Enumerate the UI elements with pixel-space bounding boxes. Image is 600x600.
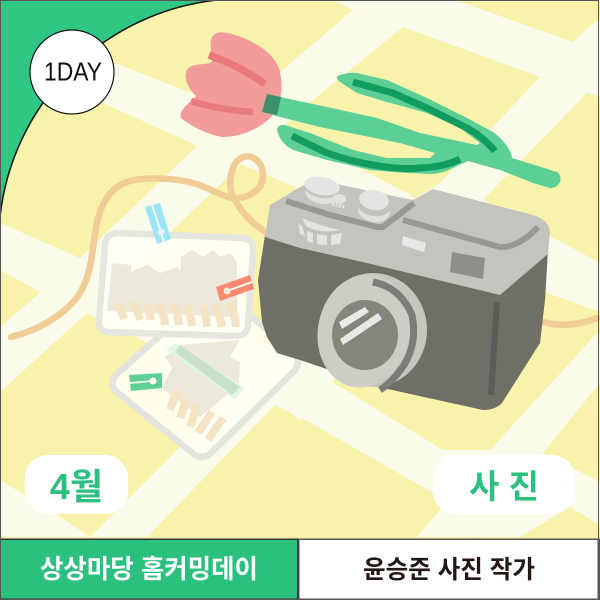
grip strip xyxy=(491,302,497,395)
bottom bar: event name: 상상마당 홈커밍데이 xyxy=(40,554,258,584)
clip: red xyxy=(216,275,254,301)
photo: upper print xyxy=(99,203,254,336)
dials xyxy=(303,174,393,225)
camera top plate xyxy=(265,180,550,295)
badge: 1DAY xyxy=(30,30,114,114)
stem and leaves xyxy=(262,73,561,188)
pill: category: 사 진 xyxy=(469,468,539,505)
clip: blue xyxy=(145,203,171,244)
string xyxy=(11,156,597,337)
bottom bar: event name xyxy=(0,538,299,600)
pill: category xyxy=(433,455,575,514)
flash window xyxy=(402,236,426,252)
pill: month: 4월 xyxy=(50,466,103,507)
camera xyxy=(258,174,550,410)
bottom bar: presenter xyxy=(298,538,600,600)
bottom bar: presenter: 윤승준 사진 작가 xyxy=(363,556,535,584)
badge: 1DAY: 1DAY xyxy=(44,56,102,86)
clip: green xyxy=(129,373,162,391)
photo: lower rotated print xyxy=(112,292,298,457)
green corner arc xyxy=(0,0,217,217)
camera body xyxy=(258,220,548,410)
viewfinder xyxy=(450,252,485,279)
shutter dial xyxy=(298,218,342,245)
tulip xyxy=(181,32,282,137)
lens xyxy=(307,266,427,396)
pill: month xyxy=(25,455,128,514)
